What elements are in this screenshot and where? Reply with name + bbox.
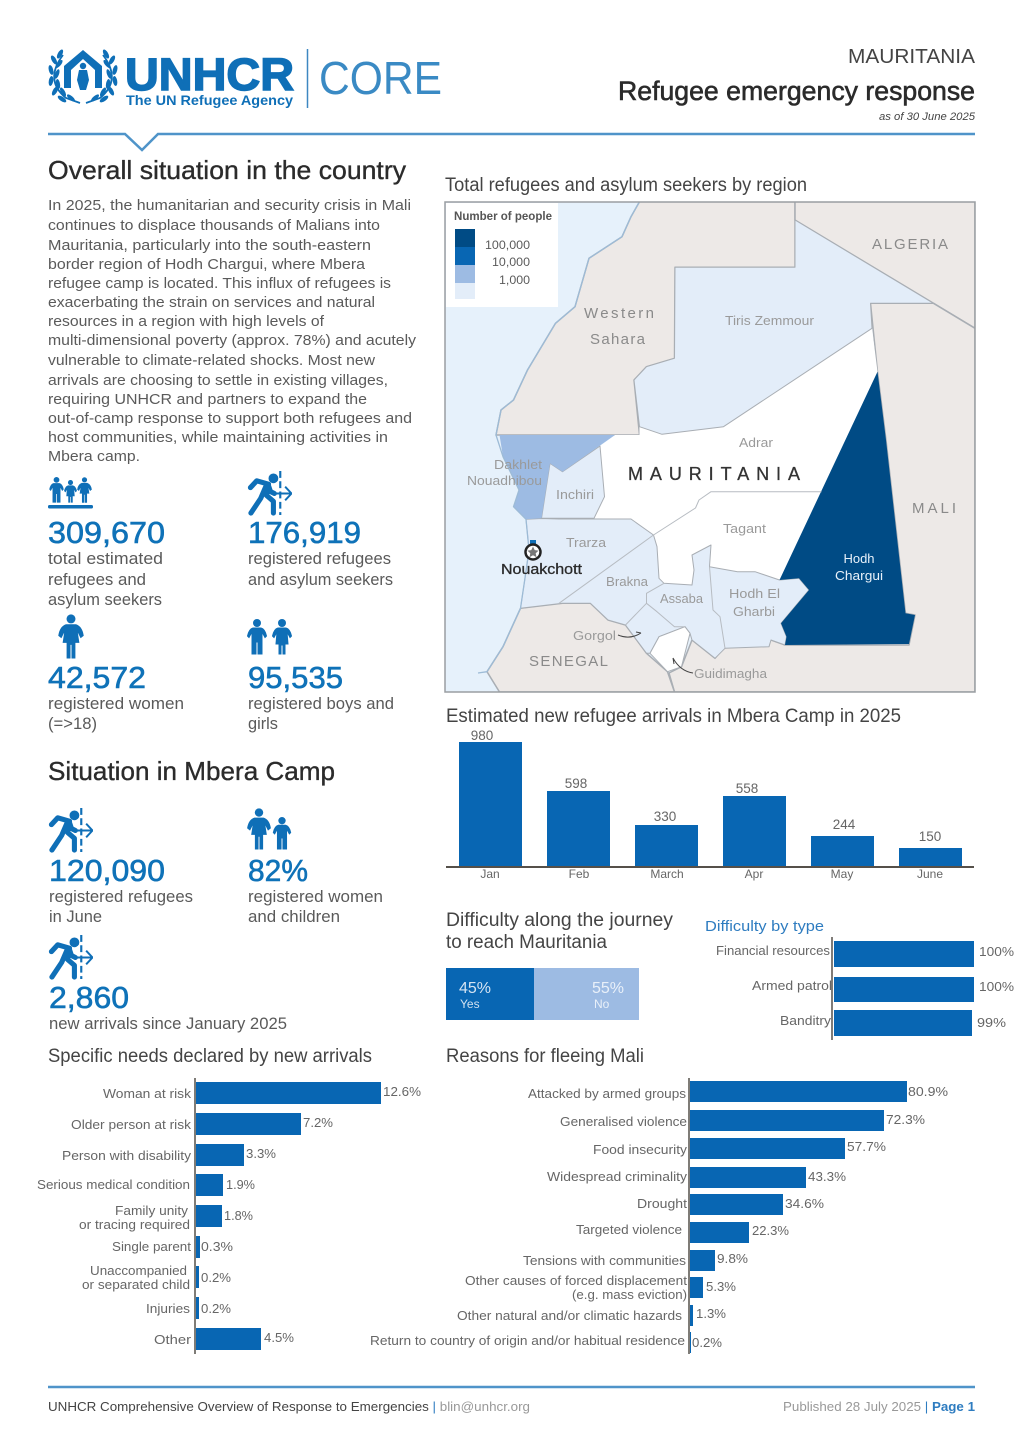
- heading: arrivals chart: Estimated new refugee arrivals in Mbera Camp in 2025: [446, 706, 901, 727]
- stat: total estimated: [48, 477, 165, 609]
- stat: registered women: 42,572: [48, 660, 146, 695]
- bar chart: reasons for fleeing: Widespread criminality: [547, 1169, 688, 1184]
- bar chart: difficulty by type: Banditry: [780, 1013, 832, 1028]
- bar chart: monthly arrivals: 330: [654, 809, 676, 824]
- bar chart: reasons for fleeing: Food insecurity: [593, 1142, 688, 1157]
- map: internal region borders: [559, 492, 822, 648]
- stat: registered refugees in June: 120,090: [49, 853, 165, 888]
- map labels: Inchiri: [556, 487, 594, 502]
- icon: person crossing border: [51, 935, 93, 979]
- text block: situation narrative: out-of-camp response to support both refugees and: [48, 411, 412, 427]
- text block: situation narrative: In 2025, the humanitarian and security crisis in Mali: [48, 198, 411, 214]
- text block: situation narrative: resources in a region with high levels of: [48, 314, 325, 330]
- stacked bar: difficulty yes/no: 55%: [592, 980, 624, 997]
- bar chart: reasons for fleeing: 9.8%: [717, 1251, 748, 1266]
- bar chart: monthly arrivals: June: [917, 867, 943, 881]
- bar chart: reasons for fleeing: (e.g. mass eviction): [572, 1287, 687, 1302]
- map: Dakhlet Nouadhibou: [500, 435, 615, 519]
- bar chart: monthly arrivals: 558: [736, 781, 758, 796]
- footer: [48, 1399, 975, 1414]
- text block: situation narrative: multi-dimensional poverty (approx. 78%) and acutely: [48, 333, 417, 349]
- stat: new arrivals: [49, 935, 287, 1033]
- stat: total estimated: total estimated: [48, 550, 163, 568]
- bar chart: difficulty by type: Financial resources: [716, 943, 831, 958]
- bar chart: specific needs: Other: [154, 1332, 192, 1347]
- bar chart: specific needs: 0.2%: [201, 1270, 231, 1285]
- map: Tiris Zemmour: [634, 220, 934, 434]
- map labels: MAURITANIA: [628, 464, 800, 484]
- bar chart: reasons for fleeing: 34.6%: [785, 1196, 824, 1211]
- icon: person crossing border: [51, 808, 93, 852]
- bar chart: difficulty by type: Armed patrol: [752, 978, 832, 993]
- stat: registered women: [48, 614, 184, 733]
- logo wordmark: UNHCR: [125, 49, 294, 100]
- bar chart: reasons for fleeing: Attacked by armed groups: [528, 1086, 687, 1101]
- bar chart: difficulty by type: 99%: [977, 1015, 1006, 1030]
- bar chart: specific needs: Unaccompanied: [90, 1263, 187, 1278]
- bar chart: specific needs: Woman at risk: [103, 1086, 192, 1101]
- bar chart: monthly arrivals: 244: [833, 817, 856, 832]
- icon: group of people: [48, 477, 93, 508]
- map labels: Hodh: [843, 551, 875, 566]
- stat: registered women: registered women: [48, 695, 184, 713]
- bar chart: reasons for fleeing: Targeted violence: [576, 1222, 682, 1237]
- bar chart: reasons for fleeing: Generalised violence: [560, 1114, 687, 1129]
- heading: difficulty along the journey: to reach Mauritania: [446, 932, 607, 953]
- subheading: difficulty by type: Difficulty by type: [705, 918, 824, 935]
- bar chart: specific needs: Serious medical condition: [37, 1177, 190, 1192]
- map labels: Hodh El: [729, 586, 780, 601]
- map: Guidimagha: [650, 627, 690, 672]
- icon: UNHCR emblem: [48, 49, 118, 104]
- text block: situation narrative: requiring UNHCR and partners to expand the: [48, 392, 367, 408]
- bar chart: reasons for fleeing: 80.9%: [908, 1084, 948, 1099]
- bar chart: difficulty by type: [716, 937, 1014, 1040]
- map: coastline: [478, 202, 640, 673]
- bar chart: specific needs: 1.9%: [226, 1177, 255, 1192]
- map legend: 100,000: [485, 240, 530, 252]
- stat: total estimated: refugees and: [48, 571, 146, 589]
- stat: women and children: 82%: [248, 853, 308, 888]
- stat: total estimated: asylum seekers: [48, 591, 162, 609]
- bar chart: reasons for fleeing: 5.3%: [706, 1279, 736, 1294]
- map leader lines: [618, 632, 693, 673]
- bar chart: specific needs: or tracing required: [79, 1217, 190, 1232]
- bar chart: reasons for fleeing: 0.2%: [692, 1335, 722, 1350]
- map labels: Western: [584, 305, 657, 322]
- bar chart: specific needs: [37, 1078, 421, 1354]
- icon: person crossing border: [250, 471, 292, 515]
- heading: Mbera camp: Situation in Mbera Camp: [48, 756, 335, 786]
- map: southern light regions: [520, 518, 809, 658]
- bar chart: specific needs: 12.6%: [383, 1084, 421, 1099]
- map: Adrar and Tagant: [594, 328, 878, 585]
- heading: overall situation: Overall situation in the country: [48, 155, 406, 185]
- text block: situation narrative: Mbera camp.: [48, 449, 140, 465]
- bar chart: reasons for fleeing: 1.3%: [696, 1306, 726, 1321]
- bar chart: specific needs: Family unity: [115, 1203, 189, 1218]
- map: Western Sahara: [496, 202, 795, 435]
- bar chart: specific needs: Injuries: [146, 1301, 191, 1316]
- country name: MAURITANIA: [848, 46, 976, 68]
- text block: situation narrative: host communities, while maintaining activities in: [48, 430, 388, 446]
- bar chart: reasons for fleeing: Other causes of forced displacement: [465, 1273, 687, 1288]
- footer: Published 28 July 2025 | Page 1: [783, 1399, 975, 1414]
- map: Mali: [669, 303, 975, 692]
- bar chart: specific needs: 0.2%: [201, 1301, 231, 1316]
- map labels: Gorgol: [573, 628, 616, 643]
- stat: registered refugees and asylum seekers: and asylum seekers: [248, 571, 393, 589]
- stat: total estimated: 309,670: [48, 515, 165, 550]
- map labels: SENEGAL: [529, 653, 611, 670]
- bar chart: specific needs: Single parent: [112, 1239, 191, 1254]
- bar chart: monthly arrivals: March: [650, 867, 684, 881]
- text block: situation narrative: vulnerable to climate-related shocks. Most new: [48, 353, 376, 369]
- footer: UNHCR Comprehensive Overview of Response to Emergencies | blin@unhcr.org: [48, 1399, 530, 1414]
- map labels: Brakna: [606, 574, 649, 589]
- stat: new arrivals: new arrivals since January 2025: [49, 1015, 287, 1033]
- stacked bar: difficulty yes/no: No: [594, 997, 610, 1011]
- map labels: Assaba: [660, 591, 704, 606]
- map: Senegal: [487, 603, 674, 692]
- map: Hodh Chargui: [780, 372, 915, 645]
- map labels: MALI: [912, 500, 959, 517]
- logo CORE: CORE: [319, 52, 442, 104]
- map labels: ALGERIA: [872, 236, 951, 253]
- bar chart: specific needs: or separated child: [82, 1277, 190, 1292]
- bar chart: monthly arrivals: Feb: [569, 867, 590, 881]
- bar chart: specific needs: 0.3%: [201, 1239, 233, 1254]
- map labels: Gharbi: [733, 604, 775, 619]
- text block: situation narrative: arrivals are choosing to settle in existing villages,: [48, 373, 388, 389]
- icon: boy and girl: [248, 619, 292, 654]
- map legend: 1,000: [499, 275, 530, 287]
- date: as of 30 June 2025: [879, 111, 976, 123]
- bar chart: reasons for fleeing: 43.3%: [808, 1169, 846, 1184]
- stat: registered refugees in June: [49, 808, 193, 926]
- text block: situation narrative: exacerbating the strain on services and natural: [48, 295, 375, 311]
- bar chart: monthly arrivals: 150: [919, 829, 941, 844]
- bar chart: specific needs: Person with disability: [62, 1148, 192, 1163]
- stat: registered refugees and asylum seekers: 176,919: [248, 515, 361, 550]
- map labels: Adrar: [739, 435, 774, 450]
- bar chart: monthly arrivals: 980: [471, 728, 493, 743]
- bar chart: specific needs: Older person at risk: [71, 1117, 192, 1132]
- map labels: Sahara: [590, 331, 648, 348]
- map labels: Tiris Zemmour: [725, 313, 815, 328]
- map labels: Trarza: [566, 535, 607, 550]
- map legend: [446, 203, 558, 307]
- heading: difficulty along the journey: Difficulty along the journey: [446, 910, 674, 931]
- stat: registered refugees and asylum seekers: registered refugees: [248, 550, 391, 568]
- map labels: Chargui: [835, 568, 883, 583]
- text block: situation narrative: Mauritania, particularly into the south-eastern: [48, 238, 371, 254]
- stacked bar: difficulty yes/no: Yes: [460, 997, 480, 1011]
- map legend: 10,000: [492, 257, 530, 269]
- bar chart: reasons for fleeing: Drought: [637, 1196, 687, 1211]
- heading: specific needs: Specific needs declared by new arrivals: [48, 1046, 372, 1067]
- bar chart: difficulty by type: 100%: [979, 979, 1014, 994]
- text block: situation narrative: border region of Hodh Chargui, where Mbera: [48, 257, 366, 273]
- stat: registered refugees and asylum seekers: [248, 471, 393, 589]
- bar chart: reasons for fleeing: Tensions with communities: [523, 1253, 687, 1268]
- bar chart: monthly arrivals: Jan: [480, 867, 500, 881]
- bar chart: reasons for fleeing: Other natural and/or climatic hazards: [457, 1308, 683, 1323]
- bar chart: difficulty by type: 100%: [979, 944, 1014, 959]
- header: title block: [618, 46, 976, 123]
- map of Mauritania: [445, 202, 975, 692]
- stat: registered refugees in June: registered refugees: [49, 888, 193, 906]
- heading: difficulty along the journey: [446, 910, 674, 953]
- map legend: Number of people: [454, 211, 552, 223]
- stat: registered women: (=>18): [48, 715, 97, 733]
- bar chart: reasons for fleeing: 57.7%: [847, 1139, 886, 1154]
- stat: registered refugees in June: in June: [49, 908, 102, 926]
- stacked bar: difficulty yes/no: [446, 968, 639, 1020]
- map labels: Tagant: [723, 521, 766, 536]
- bar chart: specific needs: 1.8%: [224, 1208, 253, 1223]
- map labels: Nouakchott: [501, 561, 583, 578]
- bar chart: monthly arrivals: [446, 728, 974, 881]
- bar chart: monthly arrivals: May: [831, 867, 853, 881]
- bar chart: reasons for fleeing: Return to country of origin and/or habitual residence: [370, 1333, 685, 1348]
- icon: woman: [59, 614, 83, 658]
- bar chart: reasons for fleeing: 72.3%: [886, 1112, 925, 1127]
- bar chart: monthly arrivals: 598: [565, 776, 587, 791]
- stat: women and children: [248, 808, 383, 926]
- map labels: [467, 236, 959, 681]
- stat: registered boys and girls: registered boys and: [248, 695, 394, 713]
- bar chart: specific needs: 3.3%: [246, 1146, 276, 1161]
- stat: registered boys and girls: 95,535: [248, 660, 343, 695]
- bar chart: specific needs: 4.5%: [264, 1330, 294, 1345]
- bar chart: reasons for fleeing: [370, 1078, 948, 1354]
- map: Algeria: [795, 202, 975, 328]
- bar chart: monthly arrivals: Apr: [745, 867, 763, 881]
- header: logo: [48, 49, 442, 108]
- heading: map: Total refugees and asylum seekers by region: [445, 175, 807, 196]
- map labels: Nouadhibou: [467, 473, 542, 488]
- heading: reasons for fleeing: Reasons for fleeing Mali: [446, 1046, 644, 1067]
- text block: situation narrative: [48, 198, 417, 465]
- stat: women and children: and children: [248, 908, 340, 926]
- stacked bar: difficulty yes/no: 45%: [459, 980, 491, 997]
- text block: situation narrative: refugee camp is located. This influx of refugees is: [48, 276, 391, 292]
- icon: woman and child: [248, 808, 291, 849]
- text block: situation narrative: continues to displace thousands of Malians into: [48, 218, 380, 234]
- map labels: Dakhlet: [494, 457, 542, 472]
- map: Inchiri: [542, 446, 604, 518]
- bar chart: specific needs: 7.2%: [303, 1115, 333, 1130]
- bar chart: reasons for fleeing: 22.3%: [752, 1223, 789, 1238]
- report title: Refugee emergency response: [618, 76, 975, 106]
- stat: registered boys and girls: girls: [248, 715, 278, 733]
- logo tagline: The UN Refugee Agency: [126, 92, 293, 108]
- icon: capital marker: [526, 540, 540, 560]
- stat: new arrivals: 2,860: [49, 980, 129, 1015]
- stat: registered boys and girls: [248, 619, 394, 733]
- stat: women and children: registered women: [248, 888, 383, 906]
- map labels: Guidimagha: [694, 666, 768, 681]
